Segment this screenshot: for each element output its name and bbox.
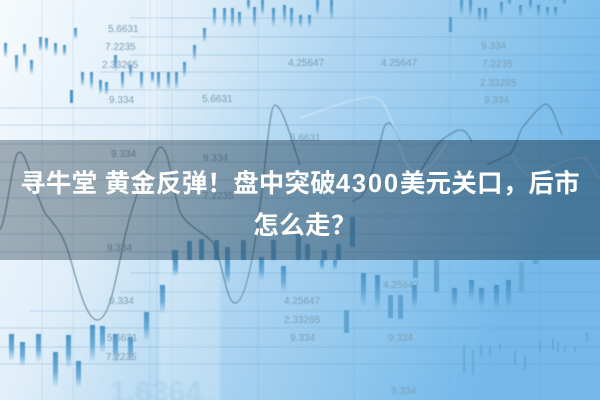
pale vertical light bands	[146, 0, 220, 400]
chart value labels: 9.334	[109, 95, 134, 106]
chart value labels: 4.25647	[284, 296, 321, 307]
chart value labels: 9.334	[388, 333, 413, 344]
chart value labels: 2.33265	[480, 78, 517, 89]
title	[20, 163, 580, 242]
chart value labels: 5.6631	[107, 333, 138, 344]
chart value labels: 7.2235	[203, 191, 234, 202]
chart value labels: 7.2235	[106, 352, 137, 363]
trend curves	[0, 97, 600, 320]
chart value labels: 4.25647	[381, 58, 418, 69]
chart value labels: 9.334	[111, 149, 136, 160]
chart value labels: 2.33265	[102, 60, 139, 71]
dark title band	[0, 140, 600, 260]
chart value labels: 9.334	[481, 41, 506, 52]
chart value labels: 7.2235	[105, 42, 136, 53]
chart value labels: 4.25647	[288, 58, 325, 69]
chart value labels: 4.25647	[383, 280, 420, 291]
chart value labels: 9.334	[290, 333, 315, 344]
chart value labels: 9.334	[203, 153, 228, 164]
chart value labels: 7.2235	[482, 59, 513, 70]
chart value labels: 9.334	[391, 386, 416, 397]
chart value labels: 5.6631	[290, 133, 321, 144]
title: 怎么走？	[253, 205, 357, 242]
chart value labels: 5.6631	[202, 94, 233, 105]
title: 寻牛堂 黄金反弹！盘中突破4300美元关口，后市	[20, 163, 580, 200]
chart value labels	[102, 24, 517, 397]
chart value labels: 2.33265	[284, 315, 321, 326]
chart value labels: 9.334	[484, 95, 509, 106]
chart value labels: 9.334	[109, 296, 134, 307]
chart value labels: 5.6631	[108, 24, 139, 35]
chart value labels: 9.334	[107, 243, 132, 254]
